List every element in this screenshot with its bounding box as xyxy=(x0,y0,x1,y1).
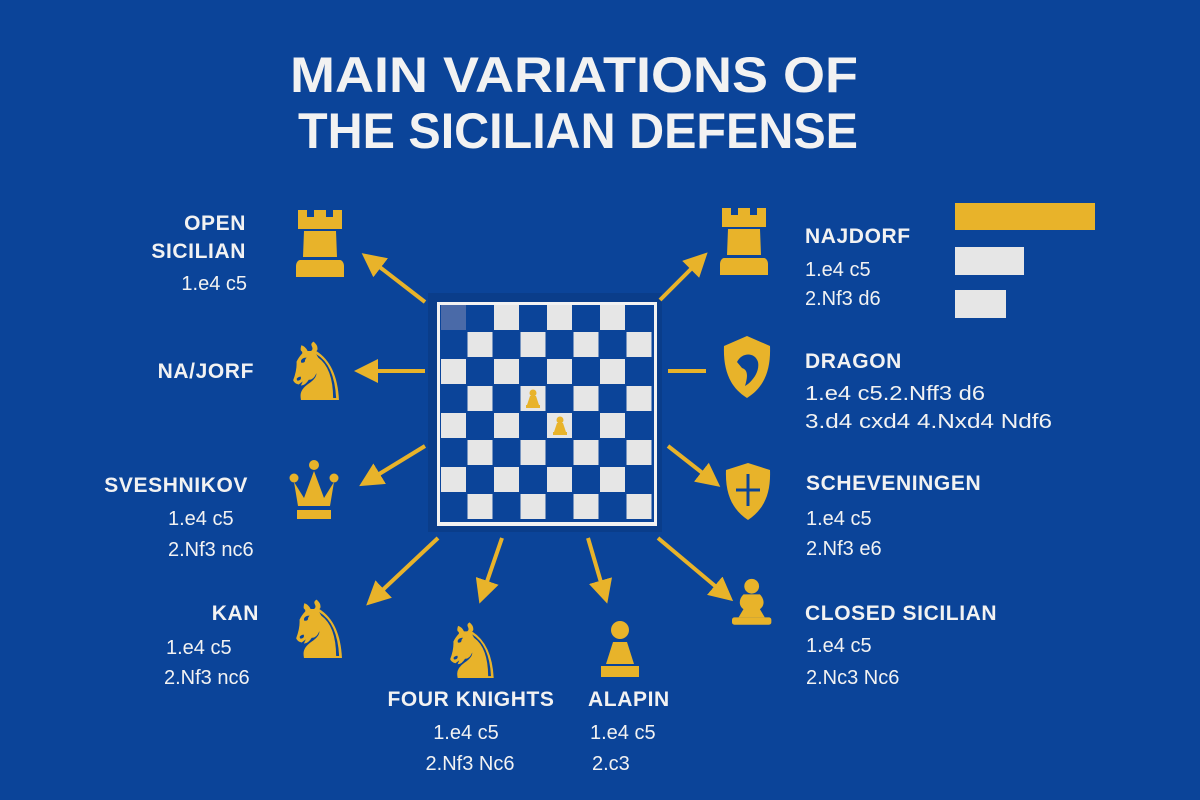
panel: open sicilian: 1.e4 c5 xyxy=(181,273,247,295)
panel: kan xyxy=(164,602,259,689)
icon: knight four knights: ♞ xyxy=(438,607,506,696)
panel: najdorf right: 2.Nf3 d6 xyxy=(805,288,881,310)
panel: sveshnikov: SVESHNIKOV xyxy=(104,474,248,497)
panel: alapin xyxy=(588,688,670,775)
panel: sveshnikov: 2.Nf3 nc6 xyxy=(168,539,254,561)
panel: alapin: 1.e4 c5 xyxy=(590,722,656,744)
panel: sveshnikov xyxy=(104,474,254,561)
icon: knight left: ♞ xyxy=(280,326,352,419)
panel: najdorf right xyxy=(805,225,911,310)
panel: four knights: FOUR KNIGHTS xyxy=(387,688,555,711)
panel: sveshnikov: 1.e4 c5 xyxy=(168,508,234,530)
panel: kan: KAN xyxy=(212,602,259,625)
panel: open sicilian: SICILIAN xyxy=(151,240,246,263)
panel: closed sicilian: 1.e4 c5 xyxy=(806,635,872,657)
bar chart xyxy=(955,203,1095,318)
panel: four knights: 2.Nf3 Nc6 xyxy=(426,753,514,775)
panel: closed sicilian xyxy=(805,602,997,689)
panel: dragon: 1.e4 c5.2.Nff3 d6 xyxy=(805,383,985,405)
panel: dragon xyxy=(805,350,1052,433)
title xyxy=(290,47,858,159)
chessboard xyxy=(428,293,662,532)
panel: najorf left: NA/JORF xyxy=(158,360,254,383)
panel: closed sicilian: 2.Nc3 Nc6 xyxy=(806,667,899,689)
title: THE SICILIAN DEFENSE xyxy=(298,103,858,159)
icon: knight kan: ♞ xyxy=(283,584,355,677)
icon: dragon shield xyxy=(724,336,770,398)
icon: pawn alapin xyxy=(601,621,639,677)
panel: alapin: ALAPIN xyxy=(588,688,670,711)
panel: scheveningen: 2.Nf3 e6 xyxy=(806,538,882,560)
panel: scheveningen xyxy=(806,472,981,560)
panel: four knights: 1.e4 c5 xyxy=(433,722,499,744)
panel: dragon: DRAGON xyxy=(805,350,902,373)
panel: kan: 2.Nf3 nc6 xyxy=(164,667,250,689)
panel: kan: 1.e4 c5 xyxy=(166,637,232,659)
panel: scheveningen: SCHEVENINGEN xyxy=(806,472,981,495)
panel: four knights xyxy=(387,688,555,775)
panel: open sicilian xyxy=(151,212,247,295)
panel: closed sicilian: CLOSED SICILIAN xyxy=(805,602,997,625)
icon: pawn closed xyxy=(732,579,771,625)
icon: rook left xyxy=(296,210,344,277)
panel: alapin: 2.c3 xyxy=(592,753,630,775)
panel: najdorf right: NAJDORF xyxy=(805,225,911,248)
icon: crown xyxy=(290,460,338,519)
icon: scheveningen shield xyxy=(726,463,770,520)
panel: open sicilian: OPEN xyxy=(184,212,246,235)
panel: dragon: 3.d4 cxd4 4.Nxd4 Ndf6 xyxy=(805,411,1052,433)
panel: najdorf right: 1.e4 c5 xyxy=(805,259,871,281)
arrows xyxy=(362,258,727,600)
title: MAIN VARIATIONS OF xyxy=(290,47,858,103)
icon: rook right xyxy=(720,208,768,275)
panel: scheveningen: 1.e4 c5 xyxy=(806,508,872,530)
